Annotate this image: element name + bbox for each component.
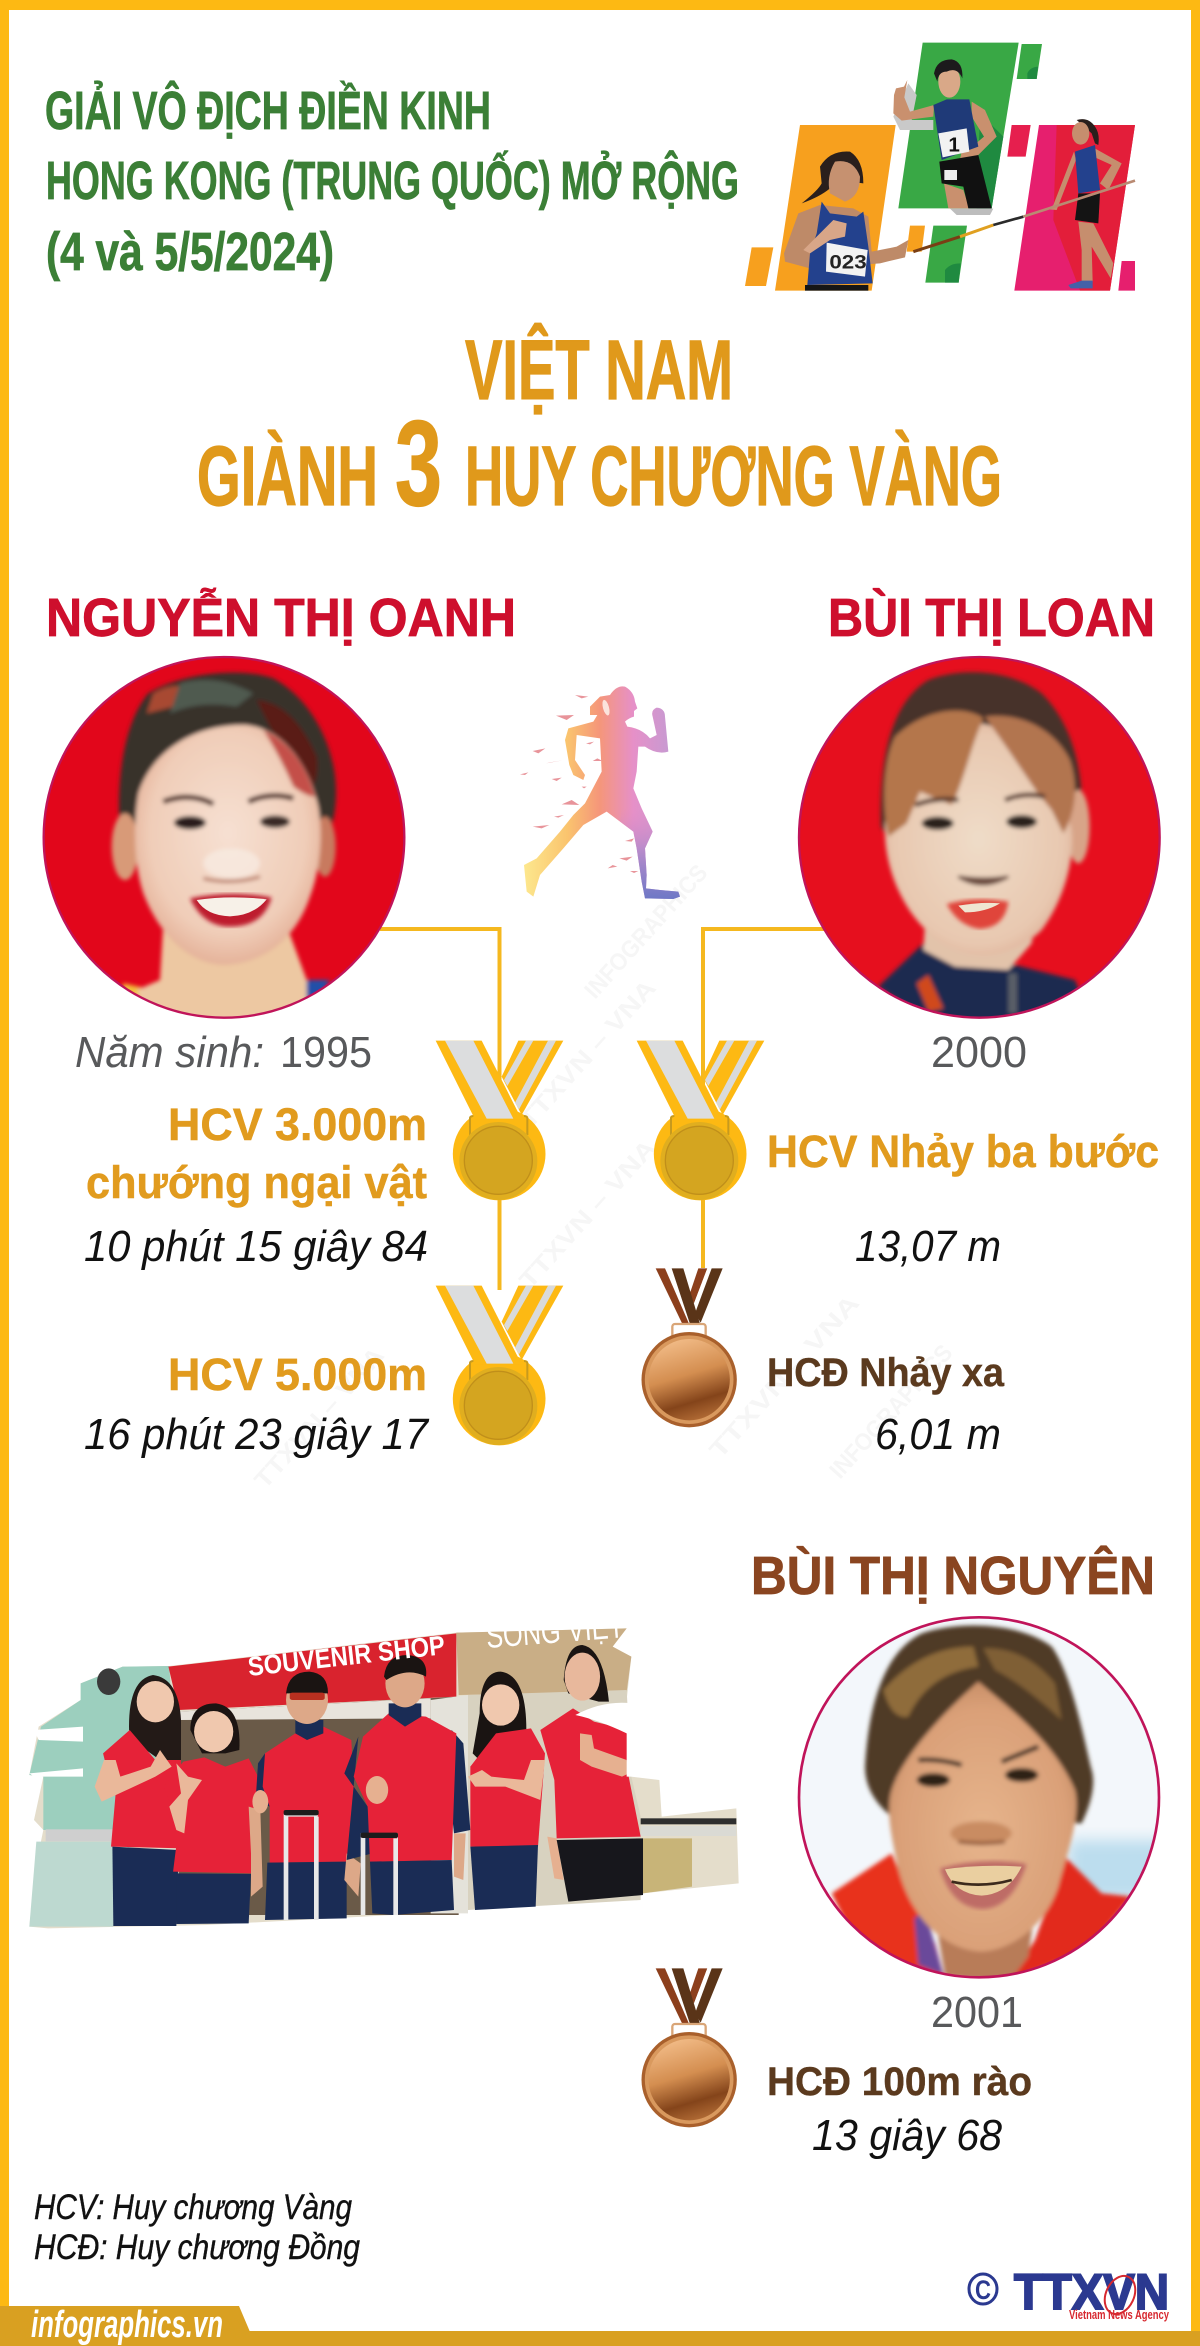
person 6 <box>540 1645 643 1902</box>
result: 5.000m: HCV 5.000m <box>168 1349 427 1400</box>
legend: abbreviations: HCV: Huy chương Vàng <box>34 2188 352 2227</box>
birth year: Oanh: Năm sinh: <box>75 1028 264 1077</box>
result: 3.000m steeplechase: 10 phút 15 giây 84 <box>84 1222 428 1271</box>
connector lines <box>380 929 825 1290</box>
portrait: Bùi Thị Nguyên <box>799 1617 1168 1983</box>
photo: Vietnamese team at the shop: SOUVENIR SHOP <box>246 1630 446 1682</box>
icon: gold medal 1 <box>436 1041 563 1200</box>
watermarks <box>249 860 958 1494</box>
watermarks: TTXVN – VNA <box>249 1342 390 1494</box>
portrait: Bùi Thị Loan <box>799 657 1160 1022</box>
athlete: middle runner: 1 <box>948 134 960 157</box>
footer band: infographics.vn <box>31 2304 223 2346</box>
photo: Vietnamese team at the shop <box>29 1607 739 1928</box>
birth year: Oanh <box>75 1028 372 1077</box>
vaulting pole <box>913 181 1135 252</box>
athlete: middle runner <box>893 59 997 215</box>
result: 3.000m steeplechase: chướng ngại vật <box>86 1157 427 1208</box>
athlete: right pole vaulter <box>1048 119 1122 288</box>
portrait: Nguyễn Thị Oanh <box>44 657 404 1023</box>
watermarks: TTXVN – VNA <box>704 1290 865 1464</box>
result: 5.000m: 16 phút 23 giây 17 <box>84 1410 429 1459</box>
main heading <box>197 323 1002 531</box>
person 1 <box>95 1675 183 1926</box>
watermarks: INFOGRAPHICS <box>824 1340 958 1484</box>
result: long jump: 6,01 m <box>875 1410 1001 1459</box>
result: 100m hurdles: HCĐ 100m rào <box>767 2060 1032 2104</box>
logo: TTXVN: TTXVN <box>1014 2264 1169 2320</box>
result: triple jump: 13,07 m <box>855 1222 1001 1271</box>
result: 5.000m <box>84 1349 429 1459</box>
legend: abbreviations <box>34 2188 360 2267</box>
icon: bronze medal 2 <box>641 1968 737 2127</box>
heading: tournament title: HONG KONG (TRUNG QUỐC) MỞ RỘNG <box>46 150 739 211</box>
heading: Nguyễn Thị Oanh: NGUYỄN THỊ OANH <box>46 587 516 648</box>
birth year: Oanh: 1995 <box>280 1028 372 1077</box>
person 5 <box>468 1672 545 1910</box>
watermarks: TTXVN – VNA <box>514 1135 662 1294</box>
result: long jump: HCĐ Nhảy xa <box>767 1351 1005 1395</box>
result: long jump <box>767 1351 1005 1459</box>
watermarks: INFOGRAPHICS <box>579 860 713 1004</box>
heading: tournament title: GIẢI VÔ ĐỊCH ĐIỀN KINH <box>45 80 491 141</box>
icon: gold medal 2 <box>436 1286 563 1445</box>
person 2 <box>164 1703 263 1924</box>
logo: TTXVN: C <box>975 2275 991 2305</box>
heading: tournament title <box>45 80 739 282</box>
result: 100m hurdles <box>767 2060 1032 2160</box>
birth year: Nguyên: 2001 <box>931 1988 1023 2037</box>
legend: abbreviations: HCĐ: Huy chương Đồng <box>34 2228 360 2267</box>
result: 3.000m steeplechase <box>84 1099 428 1271</box>
icon: running woman <box>520 686 683 902</box>
main heading: GIÀNH <box>197 429 378 523</box>
athlete: left runner: 023 <box>829 252 867 273</box>
main heading: 3 <box>395 395 442 531</box>
birth year: Loan: 2000 <box>931 1028 1027 1077</box>
footer band <box>0 2304 1200 2346</box>
result: 3.000m steeplechase: HCV 3.000m <box>168 1099 427 1150</box>
result: 100m hurdles: 13 giây 68 <box>812 2111 1002 2160</box>
person 4 <box>344 1655 470 1915</box>
heading: Bùi Thị Nguyên: BÙI THỊ NGUYÊN <box>751 1545 1155 1606</box>
photo: Vietnamese team at the shop: SÔNG VIỆT <box>485 1607 625 1656</box>
heading: Bùi Thị Loan: BÙI THỊ LOAN <box>828 588 1155 648</box>
illustration: three athletes on coloured bars <box>745 43 1135 291</box>
icon: bronze medal 1 <box>641 1268 737 1427</box>
heading: tournament title: (4 và 5/5/2024) <box>46 222 334 282</box>
result: triple jump <box>767 1126 1159 1271</box>
result: triple jump: HCV Nhảy ba bước <box>767 1126 1159 1177</box>
athlete: left runner <box>784 152 908 291</box>
icon: gold medal 3 <box>637 1041 764 1200</box>
main heading: VIỆT NAM <box>465 323 733 417</box>
watermarks: TTXVN – VNA <box>514 975 662 1134</box>
person 3 <box>252 1672 361 1920</box>
